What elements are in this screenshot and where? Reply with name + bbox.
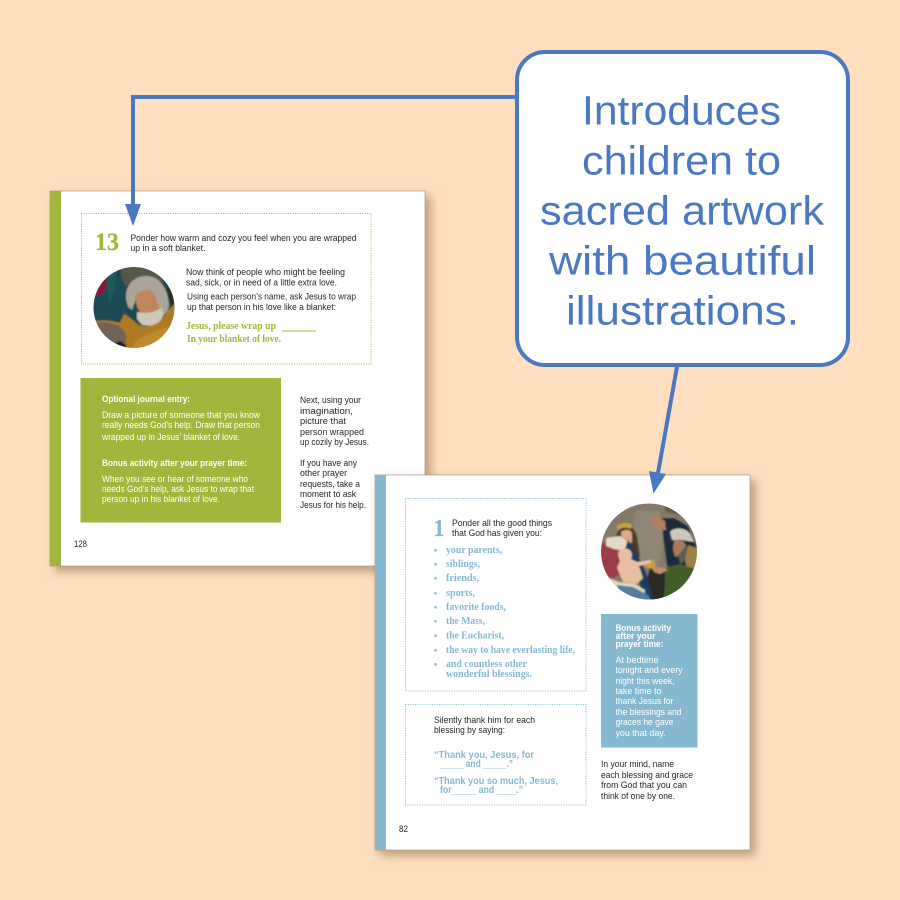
callout text: [540, 88, 825, 334]
prayer in green: In your blanket of love.: [187, 334, 281, 345]
instruction text: Using each person’s name, ask Jesus to wrap: [187, 290, 356, 302]
blessings list: [434, 545, 575, 680]
bonus text: [616, 654, 683, 738]
painting: Holy Family with Simeon: [601, 504, 697, 600]
prayer lines: “Thank you so much, Jesus,: [434, 776, 558, 787]
step intro text: Ponder how warm and cozy you feel when you are wrapped: [130, 232, 356, 243]
side text column: imagination,: [300, 405, 353, 416]
heading: bonus activity: prayer time:: [616, 639, 664, 649]
heading: bonus activity: after your: [616, 631, 656, 641]
arrow: callout to page 82: [649, 364, 678, 494]
callout text: children to: [582, 138, 781, 184]
journal text: Draw a picture of someone that you know: [102, 409, 260, 420]
side text column: other prayer: [300, 467, 347, 478]
prayer in green: Jesus, please wrap up: [186, 321, 276, 332]
side text column: Jesus for his help.: [300, 499, 366, 510]
bonus text: thank Jesus for: [616, 695, 674, 706]
bonus text: [102, 473, 254, 504]
blessings list: the Mass,: [446, 616, 485, 627]
blessings list: the way to have everlasting life,: [446, 645, 575, 656]
bonus text: graces he gave: [616, 716, 674, 727]
bonus text: needs God’s help, ask Jesus to wrap that: [102, 483, 254, 494]
journal text: wrapped up in Jesus’ blanket of love.: [101, 431, 240, 442]
blessings list: wonderful blessings.: [446, 669, 532, 680]
blessings list: the Eucharist,: [446, 630, 504, 642]
bonus text: tonight and every: [616, 664, 683, 675]
painting: sleeping Joseph: [94, 267, 174, 348]
page 82 (blue): [375, 475, 750, 850]
side text column: Next, using your: [300, 394, 361, 405]
panel: prayer step 13: [82, 214, 371, 364]
side text: [601, 758, 693, 801]
blessings list: and countless other: [446, 659, 527, 670]
heading: bonus activity: Bonus activity after your prayer time:: [102, 458, 247, 468]
instruction text: up that person in his love like a blanket:: [187, 301, 336, 312]
panel: thank-you prayer: [406, 704, 586, 805]
side text column: moment to ask: [300, 488, 356, 499]
side text column: [300, 394, 369, 510]
panel: bonus activity: [601, 614, 698, 748]
bonus text: night this week,: [616, 675, 674, 686]
panel: journal and bonus activity: [80, 378, 281, 522]
step intro text: [130, 232, 356, 253]
step number 1: 1: [434, 516, 444, 542]
step number 13: 13: [95, 229, 119, 256]
side text: from God that you can: [601, 779, 687, 790]
bonus text: take time to: [616, 685, 662, 696]
bonus text: the blessings and: [616, 706, 682, 717]
callout text: with beautiful: [548, 238, 816, 284]
callout text: Introduces: [582, 88, 781, 134]
bonus text: At bedtime: [616, 654, 658, 665]
blessings list: siblings,: [446, 559, 480, 570]
side text column: picture that: [300, 415, 346, 426]
callout text: sacred artwork: [540, 188, 825, 234]
journal text: [101, 409, 260, 442]
side text: In your mind, name: [601, 758, 674, 769]
blessings list: sports,: [446, 588, 475, 599]
instruction text: [186, 266, 356, 312]
prayer lines: _____ and _____.”: [439, 759, 513, 770]
blue page edge bar: [375, 475, 386, 850]
side text column: person wrapped: [300, 426, 364, 437]
heading: bonus activity: [616, 623, 672, 649]
instruction text: blessing by saying:: [434, 724, 505, 735]
prayer in green: [186, 321, 316, 345]
step intro text: [452, 517, 552, 538]
arrow: callout to page 128: [125, 97, 518, 226]
side text: think of one by one.: [601, 790, 675, 801]
instruction text: Silently thank him for each: [434, 714, 535, 725]
page number 128: 128: [74, 538, 87, 549]
blessings list: favorite foods,: [446, 602, 506, 613]
step intro text: up in a soft blanket.: [130, 242, 206, 253]
blessings list: friends,: [446, 573, 479, 584]
side text column: If you have any: [300, 457, 357, 468]
bonus text: you that day.: [616, 727, 666, 738]
green page edge bar: [50, 191, 61, 566]
prayer lines: “Thank you, Jesus, for: [434, 750, 534, 761]
heading: optional journal entry: Optional journal entry:: [102, 394, 190, 404]
bonus text: person up in his blanket of love.: [102, 493, 220, 504]
prayer lines: [434, 750, 558, 796]
blessings list: your parents,: [446, 545, 502, 556]
bonus text: When you see or hear of someone who: [102, 473, 248, 484]
instruction text: Now think of people who might be feeling: [186, 266, 345, 277]
instruction text: sad, sick, or in need of a little extra love.: [186, 276, 337, 288]
page number 82: 82: [399, 823, 408, 834]
journal text: really needs God’s help. Draw that person: [102, 419, 260, 430]
prayer lines: for_____ and ____.”: [440, 785, 523, 796]
side text column: requests, take a: [300, 478, 361, 489]
instruction text: [434, 714, 535, 735]
callout text: illustrations.: [566, 288, 799, 334]
side text column: up cozily by Jesus.: [300, 436, 369, 447]
step intro text: Ponder all the good things: [452, 517, 552, 528]
side text: each blessing and grace: [601, 769, 693, 780]
heading: bonus activity: Bonus activity: [616, 623, 672, 633]
page 128 (green): [50, 191, 425, 566]
panel: prayer step 1: [406, 498, 586, 691]
callout: [517, 52, 848, 365]
step intro text: that God has given you:: [452, 527, 542, 538]
